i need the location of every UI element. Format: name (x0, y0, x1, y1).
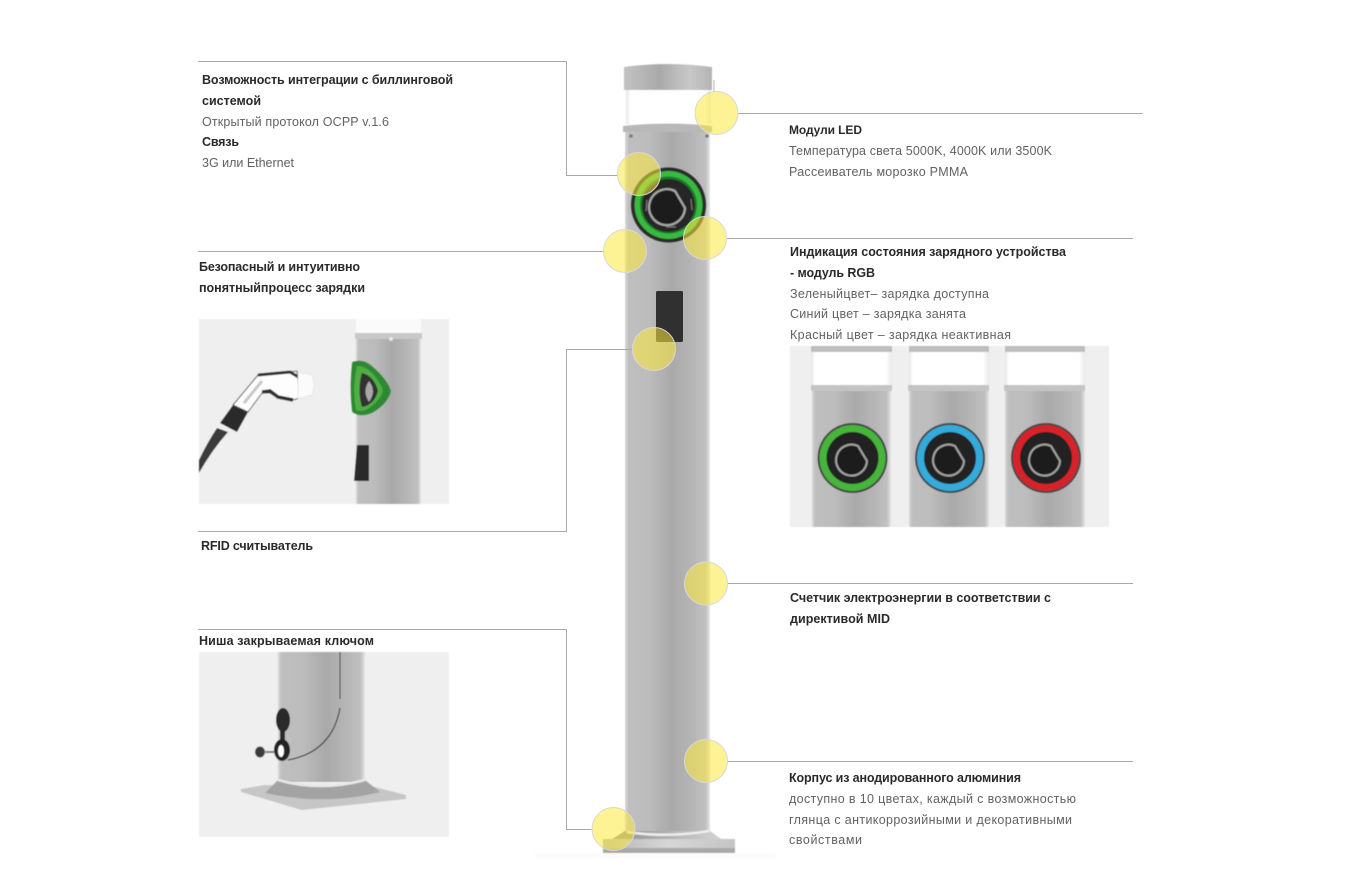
post body (625, 132, 710, 834)
text: LED modules: Температура света 5000K, 4000K или 3500K (789, 144, 1053, 158)
connector lines (198, 62, 1143, 830)
base weld (278, 780, 365, 786)
photo: plug and socket (199, 319, 449, 504)
small cap tick (713, 80, 715, 92)
LED diffuser (626, 90, 711, 124)
charging post (535, 64, 775, 858)
photo: three status colours (790, 346, 1109, 527)
text: safe charging (199, 260, 365, 295)
photo: base with lockable niche (199, 652, 449, 837)
text: billing integration: Связь (202, 135, 239, 149)
post: green (811, 346, 892, 527)
text: anodized aluminium body: свойствами (789, 833, 862, 847)
post lower section (278, 652, 365, 782)
text: safe charging: понятныйпроцесс зарядки (199, 281, 365, 295)
base flare (609, 831, 724, 841)
charging socket with green ring (631, 168, 706, 242)
post: red (1004, 346, 1085, 527)
post side view (356, 319, 421, 333)
text: RGB status indication: Красный цвет – зарядка неактивная (790, 328, 1011, 342)
text: anodized aluminium body (789, 771, 1076, 847)
text: energy meter (790, 591, 1051, 626)
text: anodized aluminium body: глянца с антикоррозийными и декоративными (789, 813, 1072, 827)
yellow marker dots (592, 92, 738, 850)
text: RGB status indication: Синий цвет – зарядка занята (790, 307, 966, 321)
side RFID reader (354, 445, 369, 481)
text: billing integration: системой (202, 94, 261, 108)
post: blue (908, 346, 989, 527)
text: anodized aluminium body: доступно в 10 цветах, каждый с возможностью (789, 792, 1076, 806)
text: billing integration: 3G или Ethernet (202, 156, 295, 170)
text: RFID reader: RFID считыватель (201, 539, 313, 553)
text: energy meter: Счетчик электроэнергии в соответствии с (790, 591, 1051, 605)
lock covers (280, 728, 285, 744)
base plate (241, 785, 406, 810)
base plate (603, 839, 735, 849)
text: RGB status indication: Зеленыйцвет– зарядка доступна (790, 287, 989, 301)
text: billing integration (202, 73, 453, 170)
text: RGB status indication (790, 245, 1067, 342)
text: energy meter: директивой MID (790, 612, 890, 626)
text: billing integration: Открытый протокол OCPP v.1.6 (202, 115, 389, 129)
base flare (265, 780, 380, 799)
post collar (623, 124, 712, 132)
text: RGB status indication: Индикация состояния зарядного устройства (790, 245, 1067, 259)
text: billing integration: Возможность интеграции с биллинговой (202, 73, 453, 87)
text: LED modules (789, 123, 1053, 179)
key (255, 746, 265, 758)
text: LED modules: Рассеиватель морозко PMMA (789, 165, 969, 179)
collar screws (629, 134, 633, 138)
door seam (288, 652, 340, 760)
charging plug (199, 371, 314, 473)
base weld (627, 831, 709, 835)
post top cap (624, 64, 712, 90)
text: safe charging: Безопасный и интуитивно (199, 260, 360, 274)
text: lockable niche: Ниша закрываемая ключом (199, 634, 374, 648)
text: RGB status indication: - модуль RGB (790, 266, 875, 280)
text: LED modules: Модули LED (789, 123, 862, 137)
RFID reader (656, 291, 683, 342)
side socket (350, 361, 391, 415)
text: anodized aluminium body: Корпус из анодированного алюминия (789, 771, 1021, 785)
